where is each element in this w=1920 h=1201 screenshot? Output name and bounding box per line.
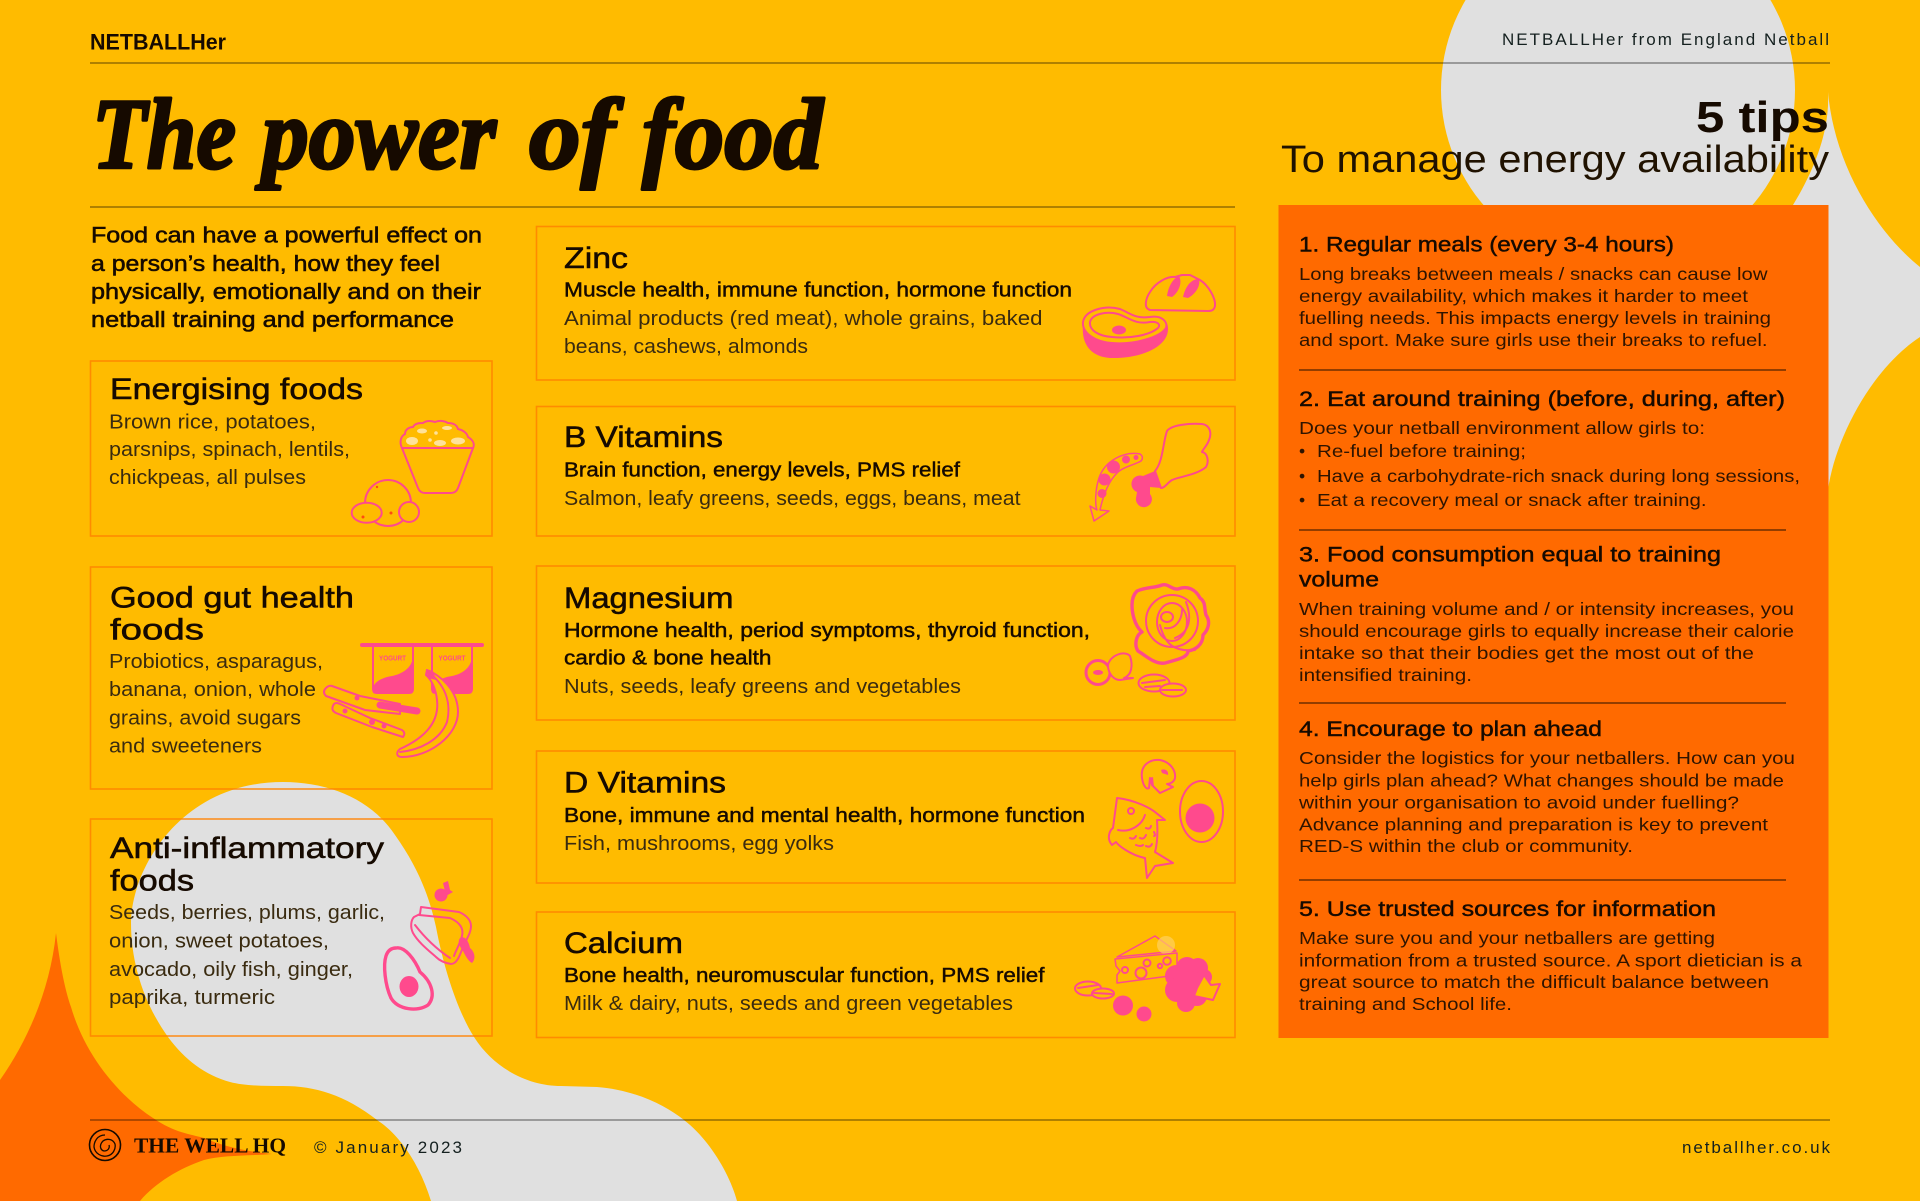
food sources: Fish, mushrooms, egg yolks — [564, 832, 834, 855]
tip 2 — [1299, 387, 1800, 510]
tip 4: within your organisation to avoid under fuelling? — [1298, 792, 1739, 812]
icon: spiral — [90, 1130, 120, 1160]
food list: Probiotics, asparagus, — [109, 650, 323, 673]
heading: Magnesium — [564, 582, 734, 615]
food list: grains, avoid sugars — [109, 706, 301, 730]
tip 4: RED-S within the club or community. — [1299, 836, 1633, 856]
panel: anti-inflammatory foods: foods — [110, 864, 194, 898]
food list: avocado, oily fish, ginger, — [109, 958, 353, 981]
benefits: Brain function, energy levels, PMS relief — [564, 458, 960, 482]
panel: d vitamins — [536, 751, 1235, 883]
food list: Seeds, berries, plums, garlic, — [109, 901, 385, 924]
icon: yogurt, asparagus and banana — [324, 645, 482, 757]
tip 2: Have a carbohydrate-rich snack during long sessions, — [1317, 466, 1800, 486]
intro text: a person’s health, how they feel — [91, 251, 440, 276]
tip 1: fuelling needs. This impacts energy levels in training — [1299, 308, 1771, 328]
intro text: netball training and performance — [91, 307, 454, 332]
tip 4: Consider the logistics for your netballers. How can you — [1299, 748, 1795, 768]
title: power — [255, 78, 498, 190]
tip 3: volume — [1299, 568, 1379, 592]
background shape: grey swoosh right — [1790, 92, 1920, 500]
tip 2: Re-fuel before training; — [1317, 441, 1526, 461]
tip 5: information from a trusted source. A sport dietician is a — [1299, 950, 1802, 970]
tip 4 — [1298, 717, 1795, 856]
tip 5 — [1299, 897, 1802, 1014]
footer logo: The Well HQ — [90, 1130, 286, 1160]
heading: B Vitamins — [564, 421, 723, 454]
tips heading: 5 tips — [1696, 93, 1829, 142]
heading: Energising foods — [110, 373, 363, 406]
food sources: Animal products (red meat), whole grains, baked — [564, 307, 1042, 330]
heading: Good gut health — [110, 582, 354, 614]
footer url: netballher.co.uk — [1682, 1138, 1830, 1157]
benefits: Bone health, neuromuscular function, PMS relief — [564, 964, 1045, 987]
tip 3: intensified training. — [1299, 665, 1472, 685]
icon: fish, mushroom and egg — [1109, 760, 1223, 878]
footer date: © January 2023 — [314, 1138, 462, 1157]
icon: rose cabbage and nuts — [1086, 585, 1209, 696]
tip 4: Advance planning and preparation is key to prevent — [1299, 814, 1768, 834]
food sources — [564, 307, 1042, 358]
title: of — [529, 78, 625, 190]
food list: Brown rice, potatoes, — [109, 410, 316, 434]
tip 2: Does your netball environment allow girls to: — [1299, 418, 1705, 438]
title: The — [92, 78, 236, 190]
tip 3: When training volume and / or intensity increases, you — [1299, 599, 1794, 619]
icon: cheese, broccoli, nuts and berries — [1075, 936, 1220, 1022]
tip 3 — [1299, 542, 1794, 685]
tip 3: intake so that their bodies get the most out of the — [1299, 643, 1754, 663]
benefits — [564, 619, 1090, 670]
food list: paprika, turmeric — [109, 986, 275, 1009]
heading: D Vitamins — [564, 766, 726, 800]
tip 2: • — [1299, 441, 1305, 461]
panel: zinc — [536, 226, 1235, 380]
icon: yogurt, asparagus and banana: YOGURT — [438, 656, 466, 662]
food list: banana, onion, whole — [109, 678, 316, 701]
benefits: Bone, immune and mental health, hormone function — [564, 804, 1085, 827]
panel: 5 tips — [1278, 205, 1828, 1038]
intro text: Food can have a powerful effect on — [91, 222, 482, 248]
background shape: grey circle top right — [1441, 0, 1795, 267]
benefits: Hormone health, period symptoms, thyroid function, — [564, 619, 1090, 642]
benefits: cardio & bone health — [564, 646, 772, 670]
tip 4: 4. Encourage to plan ahead — [1299, 717, 1602, 741]
tip 3: should encourage girls to equally increase their calorie — [1299, 621, 1794, 641]
intro text: physically, emotionally and on their — [91, 279, 481, 304]
food sources: Nuts, seeds, leafy greens and vegetables — [564, 675, 961, 698]
heading: Zinc — [564, 242, 628, 275]
panel: energising foods — [90, 361, 492, 536]
tip 2: • — [1299, 466, 1305, 486]
tip 1: Long breaks between meals / snacks can cause low — [1299, 264, 1768, 284]
panel: calcium — [536, 912, 1235, 1038]
tip 4: help girls plan ahead? What changes should be made — [1299, 770, 1784, 790]
food list: onion, sweet potatoes, — [109, 930, 329, 952]
tip 1: and sport. Make sure girls use their breaks to refuel. — [1299, 330, 1768, 350]
food sources: beans, cashews, almonds — [564, 335, 808, 358]
panel: good gut health foods — [90, 567, 492, 789]
tips heading — [1281, 93, 1829, 181]
header logo: NETBALLHer: NETBALLHer — [90, 30, 226, 54]
tip 5: training and School life. — [1299, 994, 1512, 1014]
food list — [109, 410, 350, 489]
panel: good gut health foods: foods — [110, 614, 204, 646]
intro text — [91, 222, 482, 332]
tip 1: 1. Regular meals (every 3-4 hours) — [1299, 232, 1674, 256]
footer logo: The Well HQ: THE WELL HQ — [134, 1134, 286, 1158]
panel: magnesium — [536, 566, 1235, 720]
tip 5: 5. Use trusted sources for information — [1299, 897, 1716, 921]
tip 5: great source to match the difficult balance between — [1299, 972, 1769, 992]
icon: yogurt, asparagus and banana: YOGURT — [379, 656, 407, 662]
food list: and sweeteners — [109, 734, 262, 758]
food sources: Salmon, leafy greens, seeds, eggs, beans, meat — [564, 487, 1021, 510]
tip 1 — [1299, 232, 1771, 350]
food list — [109, 901, 385, 1009]
background shape: orange peak bottom left — [0, 933, 272, 1201]
header strapline: NETBALLHer from England Netball — [1502, 30, 1829, 49]
benefits: Muscle health, immune function, hormone function — [564, 278, 1072, 302]
tip 2: • — [1299, 490, 1305, 510]
tip 2: Eat a recovery meal or snack after training. — [1317, 490, 1706, 510]
heading: Anti-inflammatory — [110, 832, 384, 865]
food sources: Milk & dairy, nuts, seeds and green vegetables — [564, 992, 1013, 1015]
heading: Calcium — [564, 927, 683, 960]
tip 5: Make sure you and your netballers are getting — [1299, 928, 1715, 948]
icon: avocado, salmon and berries — [385, 881, 474, 1009]
icon: rice bowl and potatoes — [352, 421, 474, 526]
food list: chickpeas, all pulses — [109, 466, 306, 489]
tip 3: 3. Food consumption equal to training — [1299, 542, 1721, 566]
food list — [109, 650, 323, 758]
icon: pea pod and chicken leg — [1090, 424, 1210, 521]
tip 2: 2. Eat around training (before, during, after) — [1299, 387, 1785, 411]
background shape: grey blob bottom — [131, 782, 737, 1201]
panel: anti-inflammatory foods — [90, 819, 492, 1036]
panel: b vitamins — [536, 406, 1235, 536]
title: food — [642, 78, 824, 190]
icon: steak and bread — [1083, 275, 1215, 358]
tips heading: To manage energy availability — [1281, 139, 1829, 181]
food list: parsnips, spinach, lentils, — [109, 438, 350, 461]
tip 1: energy availability, which makes it harder to meet — [1299, 286, 1748, 306]
